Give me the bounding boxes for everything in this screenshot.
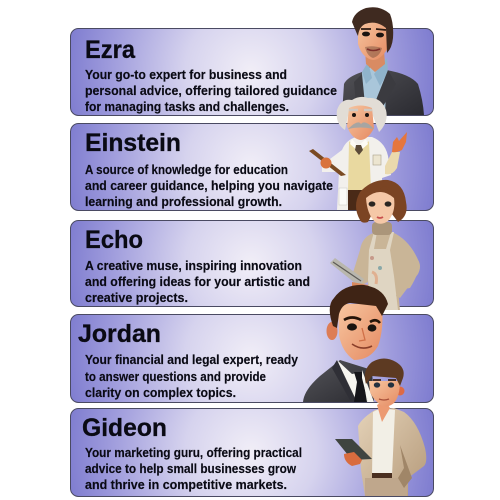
panel: Einstein	[70, 124, 434, 210]
text block: Echo description: A creative muse, inspiring innovation	[85, 259, 302, 273]
text block: Jordan description	[85, 353, 298, 400]
text block: Jordan description: Your financial and legal expert, ready	[85, 353, 298, 367]
panel: Echo	[70, 220, 434, 306]
text block: Jordan description: clarity on complex topics.	[85, 386, 236, 400]
panel: Gideon	[70, 408, 434, 496]
illustration: Jordan in suit and tie	[303, 285, 388, 402]
heading: Echo: Echo	[85, 226, 143, 254]
text block: Einstein description: and career guidance, helping you navigate	[85, 179, 333, 193]
illustration: Gideon with tablet	[335, 358, 426, 496]
text block: Gideon description: Your marketing guru, offering practical	[85, 446, 302, 460]
text block: Gideon description	[85, 446, 302, 492]
text block: Einstein description: learning and professional growth.	[85, 195, 282, 209]
text block: Echo description: creative projects.	[85, 291, 188, 305]
text block: Einstein description	[85, 163, 333, 209]
illustration: Echo in apron	[330, 180, 420, 310]
text block: Gideon description: advice to help small businesses grow	[85, 462, 296, 476]
panel: Ezra	[70, 28, 434, 116]
text block: Ezra description	[85, 68, 337, 114]
heading: Einstein: Einstein	[85, 129, 181, 157]
panel: Jordan	[70, 314, 434, 402]
illustration: Ezra in dark blazer	[342, 7, 424, 115]
heading: Jordan: Jordan	[78, 320, 161, 348]
text block: Echo description: and offering ideas for your artistic and	[85, 275, 310, 289]
heading: Ezra: Ezra	[85, 36, 136, 64]
illustration: Einstein in white coat	[309, 97, 407, 210]
heading: Gideon: Gideon	[82, 414, 167, 442]
text block: Jordan description: to answer questions and provide	[85, 370, 266, 384]
text block: Ezra description: for managing tasks and challenges.	[85, 100, 289, 114]
text block: Ezra description: Your go-to expert for business and	[85, 68, 287, 82]
text block: Echo description	[85, 259, 310, 305]
text block: Einstein description: A source of knowledge for education	[85, 163, 288, 177]
text block: Ezra description: personal advice, offering tailored guidance	[85, 84, 337, 98]
text block: Gideon description: and thrive in competitive markets.	[85, 478, 287, 492]
